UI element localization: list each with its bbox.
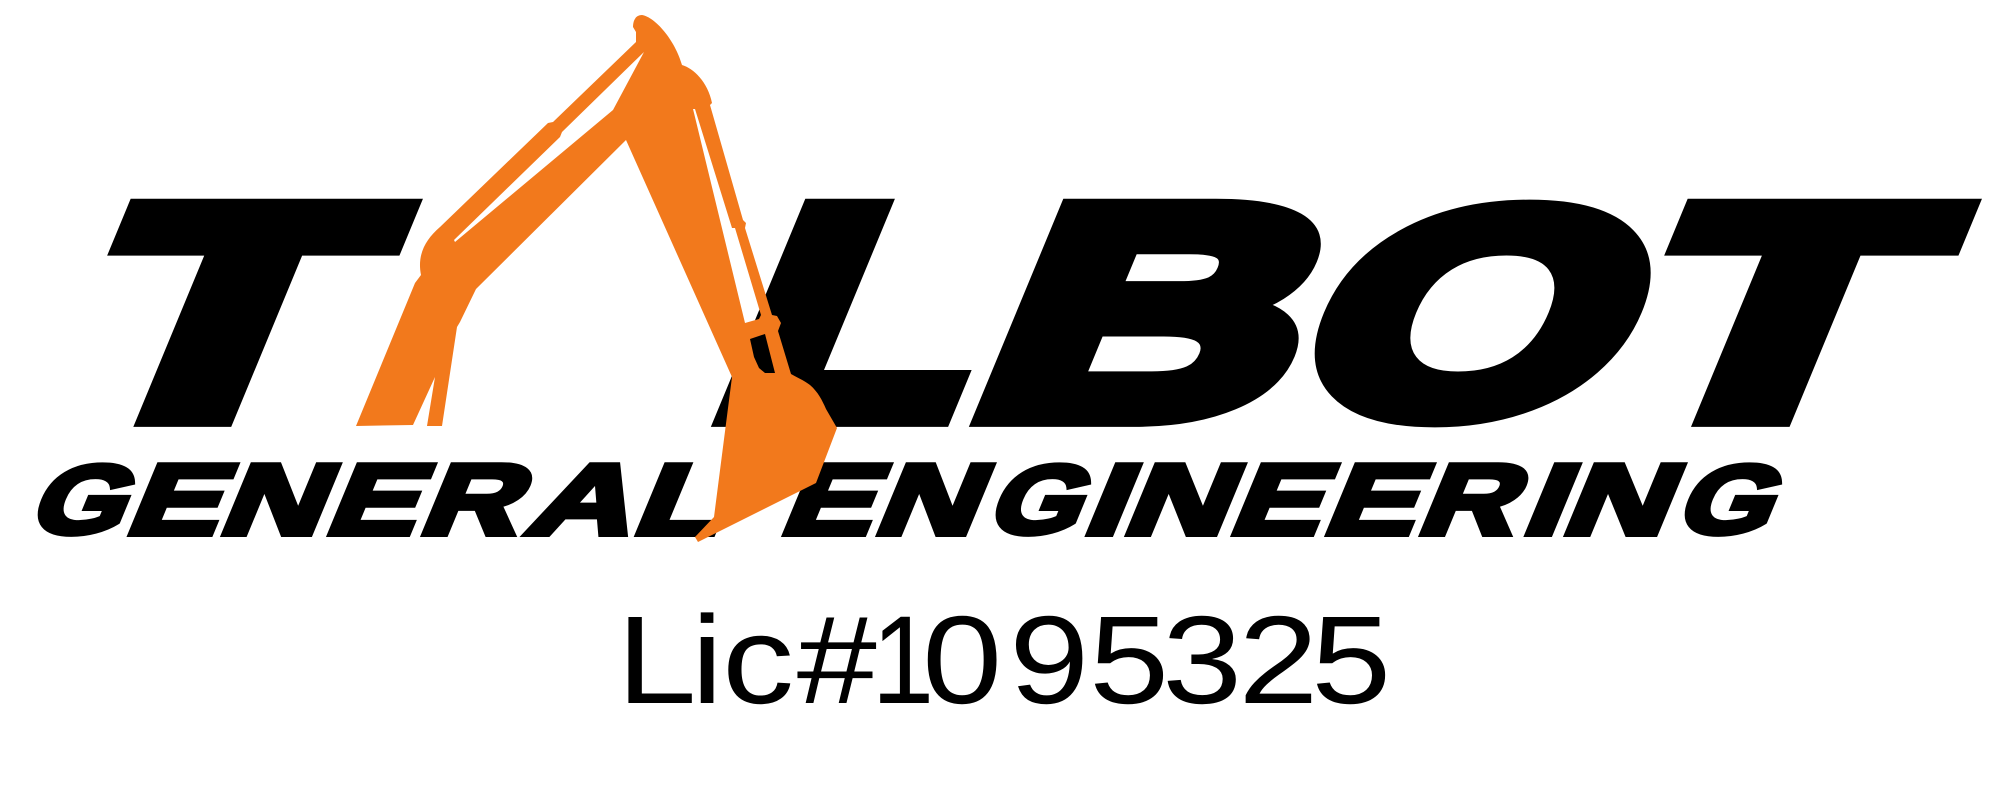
wordmark: TALBOT: T (27, 147, 432, 478)
subtitle: GENERAL ENGINEERING: A (515, 444, 664, 555)
wordmark: TALBOT: O (1256, 152, 1709, 475)
subtitle: GENERAL ENGINEERING: E (1311, 444, 1449, 556)
subtitle: GENERAL ENGINEERING (18, 443, 1803, 556)
subtitle: GENERAL ENGINEERING: G (1665, 445, 1803, 554)
wordmark: TALBOT: T (1585, 146, 1991, 478)
license number: Lic# (617, 590, 877, 730)
subtitle: GENERAL ENGINEERING: E (313, 443, 450, 555)
subtitle: GENERAL ENGINEERING: N (1550, 444, 1701, 556)
subtitle: GENERAL ENGINEERING: N (207, 444, 356, 555)
subtitle: GENERAL ENGINEERING: N (862, 443, 1010, 556)
subtitle: GENERAL ENGINEERING: I (1510, 444, 1596, 556)
subtitle: GENERAL ENGINEERING: G (975, 445, 1112, 554)
license number (617, 590, 1391, 730)
icon: orange excavator arm forming the letter A (356, 15, 837, 542)
subtitle: GENERAL ENGINEERING: G (18, 445, 156, 554)
wordmark: TALBOT (27, 146, 1991, 478)
subtitle: GENERAL ENGINEERING: E (1217, 443, 1354, 555)
subtitle: GENERAL ENGINEERING: I (1071, 444, 1157, 556)
wordmark: TALBOT: B (936, 147, 1384, 478)
subtitle: GENERAL ENGINEERING: E (114, 445, 252, 556)
wordmark: TALBOT: L (679, 147, 1061, 478)
subtitle: GENERAL ENGINEERING: R (1405, 444, 1547, 556)
subtitle: GENERAL ENGINEERING: E (768, 444, 906, 556)
subtitle: GENERAL ENGINEERING: N (1111, 444, 1261, 555)
license number: 095325 (922, 590, 1391, 730)
subtitle: GENERAL ENGINEERING: L (621, 443, 753, 555)
subtitle: GENERAL ENGINEERING: R (407, 443, 551, 555)
license number: 1 (872, 591, 934, 730)
